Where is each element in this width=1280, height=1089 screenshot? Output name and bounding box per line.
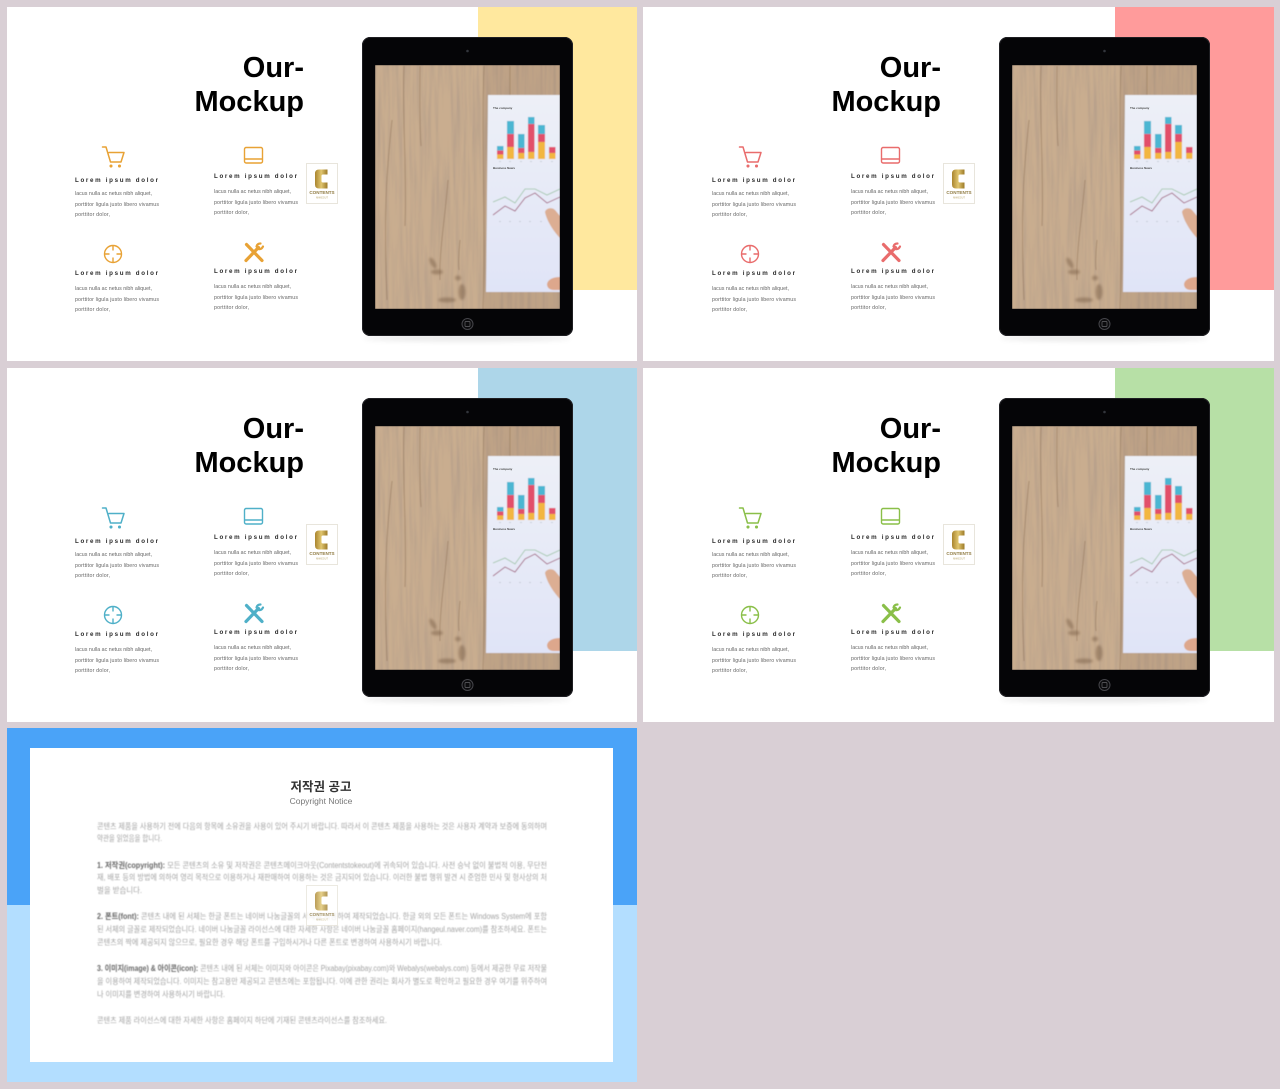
- feature: target: [75, 245, 159, 313]
- section 3: image and icon: [97, 963, 547, 999]
- feature: laptop: porttitor ligula justo libero vivamus: [851, 561, 935, 567]
- section 3: image and icon: 나 이미지를 변경하여 사용하시기 바랍니다.: [97, 989, 225, 999]
- panel: blue mockup slide: [7, 368, 637, 722]
- feature: laptop: lacus nulla ac netus nibh aliquet,: [851, 550, 928, 556]
- logo badge: [306, 524, 338, 564]
- feature: tools: [851, 604, 935, 672]
- title: Our-: [880, 413, 941, 445]
- feature: tools: porttitor ligula justo libero vivamus: [214, 295, 298, 301]
- feature: tools: lacus nulla ac netus nibh aliquet,: [851, 645, 928, 651]
- feature: cart: porttitor ligula justo libero vivamus: [75, 563, 159, 569]
- feature: tools: porttitor dolor,: [851, 666, 886, 672]
- feature: cart: [712, 508, 796, 579]
- logo badge: MAKEOUT: [953, 558, 965, 560]
- logo badge: MAKEOUT: [316, 196, 328, 200]
- feature: laptop: porttitor ligula justo libero vivamus: [214, 200, 298, 206]
- tablet mockup with chart photo: [999, 37, 1210, 341]
- slide background: [643, 7, 1274, 361]
- intro paragraph: 콘텐츠 제품을 사용하기 전에 다음의 항목에 소유권을 사용이 있어 주시기 바랍니다. 따라서 이 콘텐츠 제품을 사용하는 것은 사용자 계약과 보증에 동의하며: [97, 821, 547, 831]
- feature: tools: porttitor dolor,: [851, 305, 886, 311]
- logo badge: CONTENTS: [946, 551, 972, 556]
- feature: tools: [851, 244, 935, 311]
- feature: cart: [75, 508, 159, 579]
- feature: tools: porttitor ligula justo libero vivamus: [851, 295, 935, 301]
- feature: target: Lorem ipsum dolor: [712, 270, 796, 277]
- slide background: [7, 7, 637, 361]
- section 1: copyright: 1. 저작권(copyright): 모든 콘텐츠의 소유 및 저작권은 콘텐츠메이크아웃(Contentstokeout)에 귀속되어 있습니다. 사전 승낙 없이 불법적 이용, 무단전: [97, 860, 547, 870]
- feature: cart: Lorem ipsum dolor: [712, 538, 796, 545]
- tablet mockup with chart photo: [362, 398, 573, 702]
- logo badge: [944, 524, 974, 564]
- feature: target: lacus nulla ac netus nibh aliquet,: [712, 286, 789, 292]
- feature: tools: Lorem ipsum dolor: [214, 268, 298, 275]
- tablet mockup with chart photo: Business News: [1130, 527, 1152, 531]
- feature: tools: porttitor ligula justo libero vivamus: [851, 656, 935, 662]
- feature: target: porttitor ligula justo libero vivamus: [712, 658, 796, 664]
- feature: laptop: [214, 508, 298, 577]
- title: Mockup: [831, 447, 941, 479]
- feature: laptop: porttitor ligula justo libero vivamus: [214, 561, 298, 567]
- tablet mockup with chart photo: The company: [493, 467, 513, 471]
- tablet mockup with chart photo: Business News: [493, 527, 515, 531]
- logo badge watermark: [306, 886, 338, 926]
- logo badge: [944, 164, 974, 204]
- panel: red mockup slide: [643, 7, 1274, 361]
- logo badge watermark: MAKEOUT: [316, 918, 328, 922]
- panel: copyright notice: [7, 728, 637, 1082]
- feature: tools: Lorem ipsum dolor: [851, 268, 935, 275]
- notice title: 저작권 공고: [291, 779, 351, 794]
- feature: target: lacus nulla ac netus nibh aliquet,: [75, 647, 152, 653]
- feature: tools: [214, 604, 298, 672]
- light blue lower background: [7, 905, 637, 1082]
- title: Mockup: [194, 86, 304, 118]
- feature: tools: porttitor ligula justo libero vivamus: [214, 656, 298, 662]
- feature: target: [75, 606, 159, 674]
- feature: cart: lacus nulla ac netus nibh aliquet,: [712, 191, 789, 197]
- title: Our-: [243, 413, 304, 445]
- feature: laptop: lacus nulla ac netus nibh aliquet,: [214, 189, 291, 195]
- feature: laptop: [851, 148, 935, 216]
- section 2: font: [97, 911, 548, 947]
- feature: laptop: porttitor ligula justo libero vivamus: [851, 200, 935, 206]
- feature: target: porttitor dolor,: [712, 668, 747, 674]
- feature: target: lacus nulla ac netus nibh aliquet,: [712, 647, 789, 653]
- section 2: font: 2. 폰트(font): 콘텐츠 내에 된 서체는 한글 폰트는 네이버 나눔글꼴의 서체를 사용하여 제작되었습니다. 한글 외의 모든 폰트는 Windows System에 포함: [97, 911, 548, 921]
- title: [831, 413, 941, 479]
- feature: cart: porttitor dolor,: [712, 573, 747, 579]
- feature: tools: [214, 244, 298, 311]
- tablet mockup with chart photo: The company: [1130, 106, 1150, 110]
- colour block: [1115, 368, 1274, 651]
- feature: tools: lacus nulla ac netus nibh aliquet,: [851, 284, 928, 290]
- tablet mockup with chart photo: [999, 398, 1210, 702]
- section 3: image and icon: 을 이용하여 제작되었습니다. 이미지는 참고용만 제공되고 콘텐츠에는 포함됩니다. 이에 관한 권리는 회사가 별도로 확인하고 필요한 경우 여기를 위주하여: [97, 976, 547, 986]
- feature: target: lacus nulla ac netus nibh aliquet,: [75, 286, 152, 292]
- feature: cart: Lorem ipsum dolor: [75, 177, 159, 184]
- feature: target: porttitor ligula justo libero vivamus: [75, 297, 159, 303]
- section 2: font: 된 서체의 글꼴로 제작되었습니다. 네이버 나눔글꼴 라이선스에 대한 자세한 사항은 네이버 나눔글꼴 홈페이지(hangeul.naver.com)를 참조하세요. 폰트는: [97, 924, 547, 934]
- feature: target: porttitor dolor,: [712, 307, 747, 313]
- feature: cart: porttitor dolor,: [712, 212, 747, 218]
- logo badge: CONTENTS: [946, 190, 972, 195]
- feature: cart: porttitor ligula justo libero vivamus: [712, 202, 796, 208]
- intro paragraph: 약관을 읽었음을 합니다.: [97, 833, 162, 843]
- title: Our-: [880, 52, 941, 84]
- slide background: [7, 368, 637, 722]
- tablet mockup with chart photo: [362, 37, 573, 341]
- feature: laptop: lacus nulla ac netus nibh aliquet,: [851, 189, 928, 195]
- feature: target: Lorem ipsum dolor: [75, 270, 159, 277]
- feature: cart: porttitor dolor,: [75, 573, 110, 579]
- feature: laptop: lacus nulla ac netus nibh aliquet,: [214, 550, 291, 556]
- closing line: 콘텐츠 제품 라이선스에 대한 자세한 사항은 홈페이지 하단에 기재된 콘텐츠라이선스를 참조하세요.: [97, 1015, 387, 1025]
- feature: laptop: [214, 148, 298, 216]
- feature: laptop: porttitor dolor,: [851, 571, 886, 577]
- tablet mockup with chart photo: Business News: [1130, 166, 1152, 170]
- feature: target: Lorem ipsum dolor: [712, 631, 796, 638]
- feature: laptop: [851, 508, 935, 577]
- tablet mockup with chart photo: The company: [1130, 467, 1150, 471]
- feature: cart: Lorem ipsum dolor: [712, 177, 796, 184]
- feature: laptop: Lorem ipsum dolor: [851, 534, 935, 541]
- feature: tools: Lorem ipsum dolor: [214, 629, 298, 636]
- feature: tools: Lorem ipsum dolor: [851, 629, 935, 636]
- feature: target: porttitor ligula justo libero vivamus: [712, 297, 796, 303]
- feature: target: [712, 606, 796, 674]
- slide background: [643, 368, 1274, 722]
- feature: tools: lacus nulla ac netus nibh aliquet,: [214, 645, 291, 651]
- title: [194, 52, 304, 118]
- section 2: font: 콘텐츠의 짝에 제공되지 않으므로, 필요한 경우 해당 폰트를 구입하시거나 다른 폰트로 변경하여 사용하시기 바랍니다.: [97, 937, 442, 947]
- logo badge: MAKEOUT: [953, 196, 965, 200]
- section 3: image and icon: 3. 이미지(image) & 아이콘(icon): 콘텐츠 내에 된 서체는 이미지와 아이콘은 Pixabay(pixabay.com)와 Webalys(webalys.com) 등에서 제공한 무료 저작물: [97, 963, 547, 973]
- notice title: Copyright Notice: [290, 796, 353, 806]
- title: [831, 52, 941, 118]
- feature: cart: lacus nulla ac netus nibh aliquet,: [75, 552, 152, 558]
- feature: laptop: Lorem ipsum dolor: [214, 173, 298, 180]
- feature: tools: lacus nulla ac netus nibh aliquet,: [214, 284, 291, 290]
- intro paragraph: [97, 821, 547, 843]
- title: [194, 413, 304, 479]
- white notice card: [30, 748, 613, 1062]
- feature: target: porttitor dolor,: [75, 307, 110, 313]
- colour block: [478, 7, 637, 290]
- feature: laptop: porttitor dolor,: [214, 571, 249, 577]
- section 1: copyright: 재, 배포 등의 방법에 의하여 영리 목적으로 이용하거나 재판매하여 이용하는 것은 금지되어 있습니다. 이러한 불법 행위 발견 시 준엄한 민사 및 형사상의 처: [97, 872, 547, 882]
- logo badge: CONTENTS: [309, 190, 335, 195]
- colour block: [1115, 7, 1274, 290]
- logo badge: CONTENTS: [309, 551, 335, 556]
- feature: target: porttitor ligula justo libero vivamus: [75, 658, 159, 664]
- logo badge: [306, 164, 338, 204]
- feature: laptop: Lorem ipsum dolor: [851, 173, 935, 180]
- feature: target: Lorem ipsum dolor: [75, 631, 159, 638]
- feature: cart: lacus nulla ac netus nibh aliquet,: [712, 552, 789, 558]
- section 1: copyright: [97, 860, 547, 895]
- feature: cart: porttitor ligula justo libero vivamus: [75, 202, 159, 208]
- panel: green mockup slide: [643, 368, 1274, 722]
- logo badge watermark: CONTENTS: [309, 912, 335, 917]
- feature: cart: [75, 147, 159, 218]
- title: Mockup: [194, 447, 304, 479]
- panel: yellow mockup slide: [7, 7, 637, 361]
- feature: cart: lacus nulla ac netus nibh aliquet,: [75, 191, 152, 197]
- title: Our-: [243, 52, 304, 84]
- feature: laptop: Lorem ipsum dolor: [214, 534, 298, 541]
- feature: laptop: porttitor dolor,: [214, 210, 249, 216]
- feature: target: porttitor dolor,: [75, 668, 110, 674]
- feature: cart: [712, 147, 796, 218]
- feature: target: [712, 245, 796, 313]
- feature: tools: porttitor dolor,: [214, 666, 249, 672]
- section 1: copyright: 벌을 받습니다.: [97, 885, 142, 895]
- feature: laptop: porttitor dolor,: [851, 210, 886, 216]
- feature: cart: porttitor ligula justo libero vivamus: [712, 563, 796, 569]
- notice title: [290, 779, 353, 806]
- logo badge: MAKEOUT: [316, 558, 328, 560]
- feature: cart: porttitor dolor,: [75, 212, 110, 218]
- feature: cart: Lorem ipsum dolor: [75, 538, 159, 545]
- colour block: [478, 368, 637, 651]
- blue upper background: [7, 728, 637, 905]
- tablet mockup with chart photo: The company: [493, 106, 513, 110]
- feature: tools: porttitor dolor,: [214, 305, 249, 311]
- tablet mockup with chart photo: Business News: [493, 166, 515, 170]
- title: Mockup: [831, 86, 941, 118]
